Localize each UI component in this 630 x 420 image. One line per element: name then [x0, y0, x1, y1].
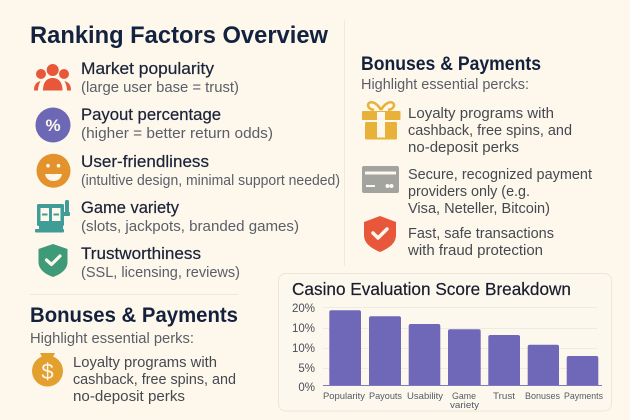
- perk: loyalty: Loyalty programs with: [408, 105, 554, 122]
- factor: market popularity: (large user base = trust): [81, 79, 239, 96]
- factor: trustworthiness: (SSL, licensing, reviews): [81, 264, 240, 281]
- factor: payout percentage: [36, 106, 273, 142]
- perk: loyalty: [362, 102, 572, 156]
- x axis labels: Trust: [493, 391, 515, 402]
- panel: ranking factors: [30, 22, 340, 281]
- icon: green shield: [38, 244, 68, 277]
- x axis labels: Bonuses: [525, 391, 560, 402]
- icon: gift: [362, 102, 400, 140]
- perk text: no-deposit perks: [73, 388, 185, 405]
- perk: safe transactions: Fast, safe transactions: [408, 225, 554, 242]
- icon: percent: %: [45, 116, 61, 135]
- perk: payment providers: [362, 166, 593, 217]
- icon: red shield: [364, 216, 396, 252]
- y axis labels: 20%: [292, 303, 315, 315]
- x axis labels: [323, 391, 603, 411]
- factor: payout percentage: Payout percentage: [81, 106, 221, 124]
- chart title: Casino Evaluation Score Breakdown: [292, 279, 571, 299]
- y axis labels: 0%: [298, 382, 315, 394]
- intro text: Highlight essential percks:: [361, 76, 529, 93]
- x axis labels: Popularity: [323, 391, 365, 402]
- y axis labels: [292, 303, 315, 394]
- perk: safe transactions: with fraud protection: [407, 242, 543, 259]
- factor: game variety: (slots, jackpots, branded games): [81, 218, 299, 235]
- panel: bonuses and payments, lower left: [30, 303, 238, 405]
- y axis labels: 10%: [292, 343, 315, 355]
- perk: safe transactions: [364, 216, 554, 259]
- factor: payout percentage: (higher = better return odds): [81, 125, 273, 142]
- perk: loyalty: cashback, free spins, and: [408, 122, 572, 139]
- perk: payment providers: Visa, Neteller, Bitcoin): [408, 200, 550, 217]
- factor: trustworthiness: [38, 244, 240, 281]
- y axis labels: 5%: [298, 363, 315, 375]
- icon: credit card: [362, 166, 399, 193]
- panel: bonuses and payments, upper right: [361, 53, 593, 259]
- factor: game variety: Game variety: [81, 199, 180, 217]
- perk text: [73, 354, 236, 405]
- icon: money bag: [32, 353, 63, 386]
- perk text: cashback, free spins, and: [73, 371, 236, 388]
- factor: user-friendliness: (intultive design, minimal support needed): [81, 172, 340, 189]
- factor: trustworthiness: Trustworthiness: [81, 245, 201, 263]
- icon: money bag: $: [41, 359, 54, 384]
- perk: payment providers: providers only (e.g.: [408, 183, 530, 200]
- x axis labels: Payments: [564, 391, 603, 402]
- x axis labels: Game: [452, 391, 476, 402]
- factor: user-friendliness: User-friendliness: [81, 153, 209, 171]
- icon: slot machine: [35, 200, 70, 232]
- bars: [329, 310, 598, 385]
- icon: people: [34, 64, 71, 90]
- x axis labels: Payouts: [369, 391, 402, 402]
- icon: smiley: [36, 154, 70, 188]
- y axis labels: 10%: [292, 323, 315, 335]
- factor: user-friendliness: [36, 153, 340, 189]
- heading: Bonuses & Payments: [30, 303, 238, 327]
- x axis labels: variety: [450, 400, 479, 411]
- title: Ranking Factors Overview: [30, 22, 329, 49]
- x axis labels: Usability: [407, 391, 443, 402]
- perk: payment providers: Secure, recognized payment: [408, 166, 593, 183]
- intro text: Highlight essential perks:: [30, 330, 194, 347]
- icon: percent: [36, 108, 70, 142]
- factor: game variety: [35, 199, 299, 235]
- factor: market popularity: Market popularity: [81, 60, 215, 78]
- perk text: Loyalty programs with: [73, 354, 217, 371]
- perk: loyalty: no-deposit perks: [408, 139, 519, 156]
- heading: Bonuses & Payments: [361, 53, 541, 75]
- panel: bar chart card: [278, 274, 612, 411]
- factor: market popularity: [34, 60, 239, 96]
